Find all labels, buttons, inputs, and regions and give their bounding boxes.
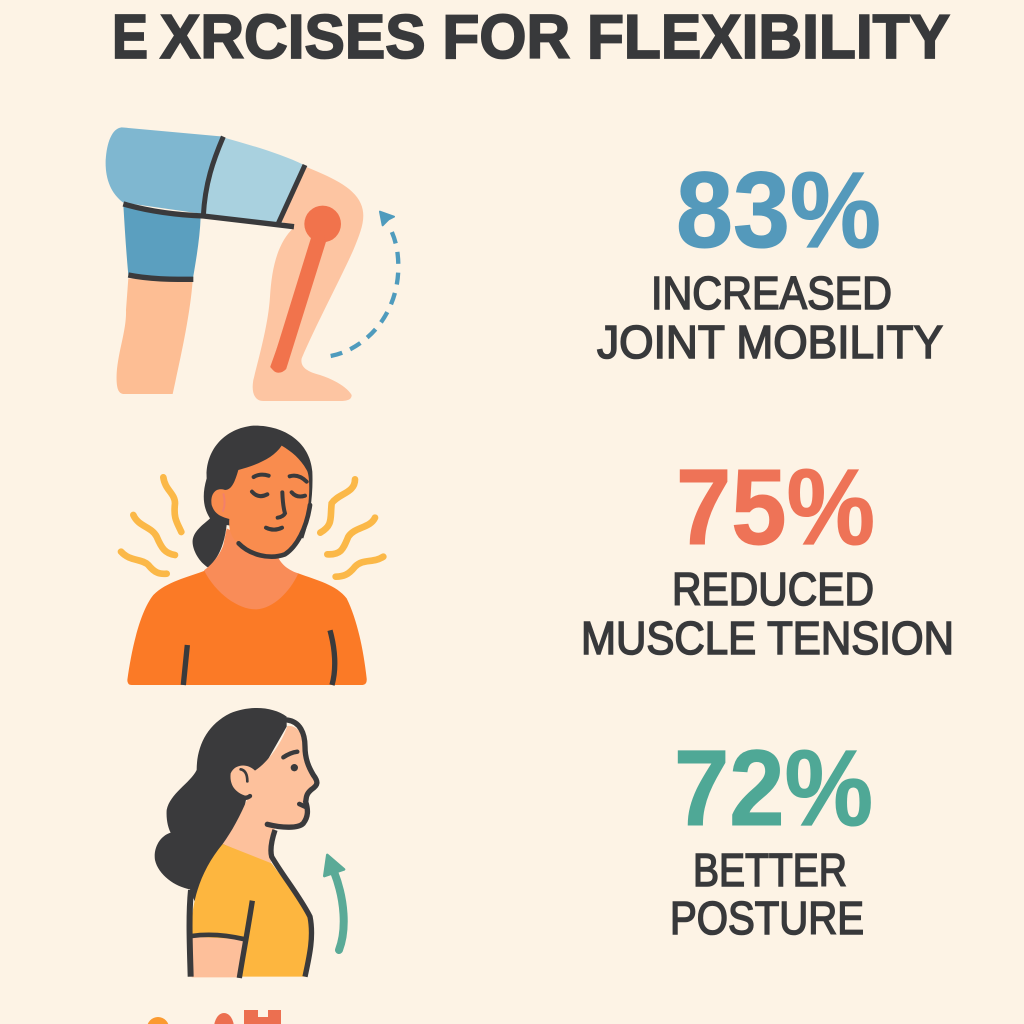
stat: 75% reduced muscle tension: REDUCED xyxy=(672,563,874,615)
stat: 83% increased joint mobility: JOINT MOBILITY xyxy=(597,316,943,368)
icon: bent knee with highlighted joint xyxy=(106,127,398,401)
stat: 72% better posture: 72% xyxy=(674,727,873,848)
stat: 83% increased joint mobility: 83% xyxy=(676,149,881,270)
icon: woman in profile with upright posture xyxy=(155,708,344,978)
stat: 75% reduced muscle tension: 75% xyxy=(676,446,875,567)
title: E xyxy=(112,3,148,72)
stat: 75% reduced muscle tension xyxy=(581,446,954,664)
icon: relaxed woman with eased shoulders xyxy=(121,426,383,685)
title: XRCISES FOR FLEXIBILITY xyxy=(160,3,950,72)
icon: cropped next illustration at bottom edge xyxy=(147,1010,281,1024)
stat: 83% increased joint mobility xyxy=(597,149,943,368)
stat: 72% better posture xyxy=(670,727,873,944)
stat: 72% better posture: BETTER xyxy=(693,844,847,896)
stat: 72% better posture: POSTURE xyxy=(670,892,864,944)
stat: 75% reduced muscle tension: MUSCLE TENSION xyxy=(581,612,954,664)
stat: 83% increased joint mobility: INCREASED xyxy=(651,267,892,319)
